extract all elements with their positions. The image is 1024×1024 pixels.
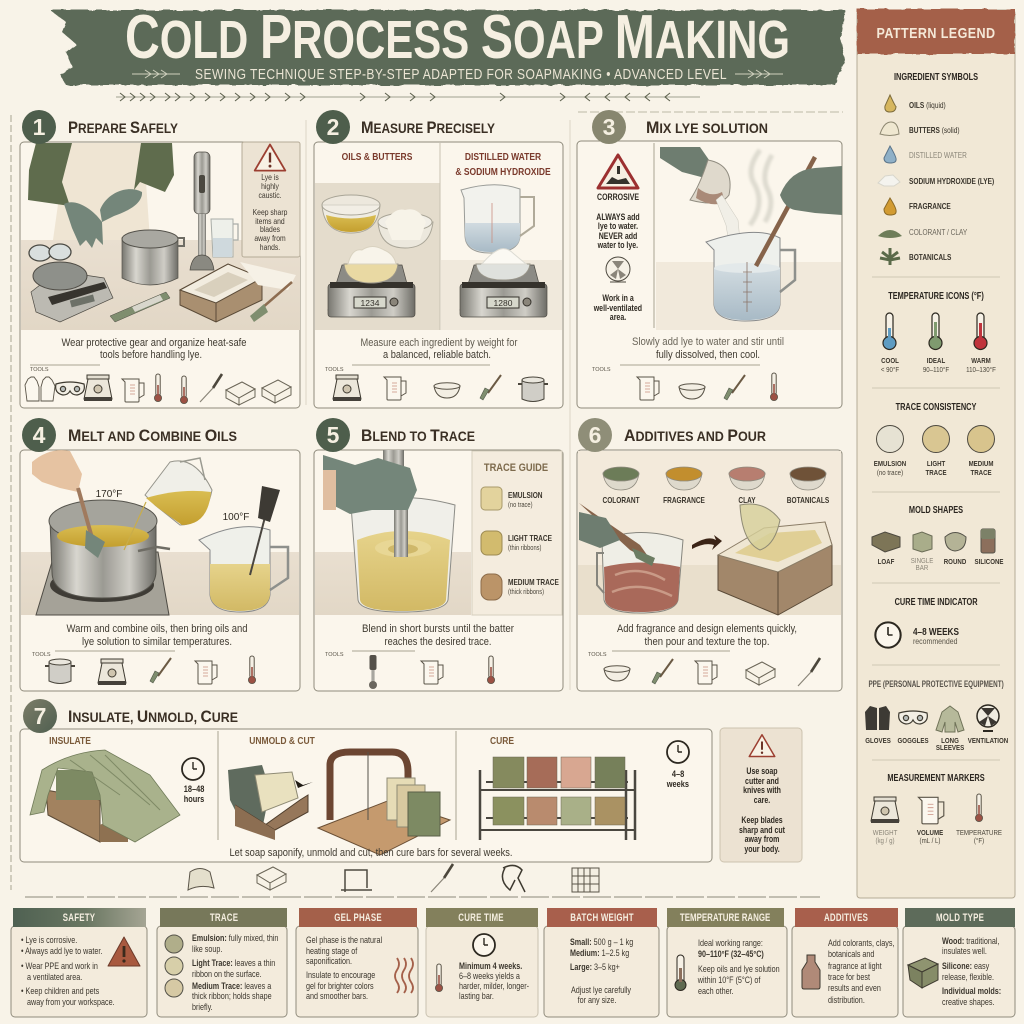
warning box	[242, 142, 300, 257]
card: batch weight: Large: 3–5 kg+	[570, 962, 620, 972]
warning box: hands.	[260, 242, 280, 252]
card: trace: like soup.	[192, 944, 222, 954]
card: mold type: release, flexible.	[942, 972, 994, 982]
step 5 badge	[316, 418, 350, 452]
tools row	[32, 651, 256, 685]
caption	[360, 337, 518, 361]
card: temperature range: each other.	[698, 986, 734, 996]
warning box: Keep sharp	[253, 207, 287, 217]
clock: 4-8 weeks	[666, 741, 689, 789]
caption	[362, 623, 514, 648]
warning box: highly	[261, 181, 279, 191]
safety column	[593, 155, 642, 322]
illustration: additives: BOTANICALS	[787, 495, 829, 505]
mold shapes: BAR	[916, 565, 928, 572]
ingredient symbols: BUTTERS (solid)	[909, 125, 960, 135]
clock: 18-48 hours	[182, 758, 205, 804]
step 3 title: MIX LYE SOLUTION	[646, 118, 768, 137]
legend header	[857, 9, 1015, 54]
ingredient symbols: OILS (liquid)	[909, 100, 946, 110]
trace consistency: TRACE	[925, 470, 947, 477]
trace guide: MEDIUM TRACE	[508, 577, 559, 587]
step 1 badge: 1	[33, 114, 46, 140]
tools row	[25, 365, 291, 405]
safety column: NEVER add	[599, 231, 637, 241]
safety column: ALWAYS add	[596, 212, 640, 222]
card: additives: fragrance at light	[828, 961, 882, 971]
card: mold type: Individual molds:	[942, 986, 1001, 996]
panel: step 7	[20, 729, 712, 862]
warning box: blades	[260, 224, 280, 234]
warning box: Lye is	[261, 172, 279, 182]
card: cure time: Minimum 4 weeks.	[459, 961, 522, 971]
safety column: area.	[610, 312, 626, 322]
caption: Slowly add lye to water and stir until	[632, 336, 784, 348]
tools row: TOOLS	[325, 367, 344, 373]
caption: Blend in short bursts until the batter	[362, 623, 514, 635]
mold shapes: SILICONE	[975, 559, 1004, 566]
step 5: blend to trace	[314, 450, 563, 691]
card: trace: ribbon on the surface.	[192, 969, 262, 979]
card: mold type	[903, 908, 1015, 1017]
step 7 warning box: cutter and	[745, 776, 779, 786]
card: mold type: insulates well.	[942, 946, 987, 956]
card: additives: Add colorants, clays,	[828, 938, 894, 948]
column headings: & SODIUM HYDROXIDE	[455, 166, 551, 177]
caption	[632, 336, 784, 361]
trace consistency: EMULSION	[874, 461, 906, 468]
step 7 warning box: Keep blades	[741, 815, 783, 825]
temperature icons	[872, 277, 1000, 760]
card: gel phase: Gel phase is the natural	[306, 935, 382, 945]
clock: 18-48 hours: 18–48	[184, 783, 205, 794]
personal protective equipment: SLEEVES	[936, 745, 965, 752]
card: batch weight: Small: 500 g – 1 kg	[570, 937, 633, 947]
cure time indicator: 4–8 WEEKS	[913, 626, 959, 637]
legend panel	[857, 9, 1015, 898]
trace consistency: TRACE CONSISTENCY	[896, 401, 977, 412]
card: temperature range: 90–110°F (32–45°C)	[698, 949, 764, 959]
column headings	[342, 151, 551, 177]
step 6 title: ADDITIVES AND POUR	[624, 426, 766, 445]
caption: fully dissolved, then cool.	[656, 349, 760, 361]
safety column: lye to water.	[598, 221, 638, 231]
step 7 warning box: sharp and cut	[739, 825, 785, 835]
caption	[62, 337, 246, 361]
card: gel phase: gel for brighter colors	[306, 981, 374, 991]
card: additives: trace for best	[828, 972, 871, 982]
illustration: curing rack	[480, 735, 636, 840]
illustration: workspace	[21, 143, 300, 330]
cure time indicator: recommended	[913, 636, 958, 646]
ingredient symbols	[878, 71, 995, 265]
step 5 title: BLEND TO TRACE	[361, 426, 475, 445]
illustration: additives	[578, 451, 841, 615]
subtitle: SEWING TECHNIQUE STEP-BY-STEP ADAPTED FOR SOAPMAKING • ADVANCED LEVEL	[195, 67, 727, 83]
cure time indicator: CURE TIME INDICATOR	[895, 596, 978, 607]
card: mold type: Silicone: easy	[942, 961, 989, 971]
card: additives: ADDITIVES	[824, 912, 868, 924]
illustration: melting oils	[21, 450, 299, 615]
step 7 warning box: away from	[745, 834, 779, 844]
measurement markers: MEASUREMENT MARKERS	[887, 772, 985, 783]
clock: 4-8 weeks: weeks	[666, 778, 689, 789]
card: temperature range: Keep oils and lye solution	[698, 964, 780, 974]
safety column: Work in a	[602, 293, 634, 303]
panel: step 6	[577, 450, 842, 691]
caption: lye solution to similar temperatures.	[82, 636, 232, 648]
card: batch weight	[544, 908, 659, 1017]
temperature icons: WARM	[971, 358, 991, 365]
personal protective equipment: VENTILATION	[968, 738, 1008, 745]
step 4 badge: 4	[33, 422, 46, 448]
personal protective equipment: GOGGLES	[898, 738, 929, 745]
card: cure time: 6–8 weeks yields a	[459, 971, 520, 981]
panel: step 5	[314, 450, 563, 691]
card: trace: briefly.	[192, 1002, 213, 1012]
icon: fan	[606, 257, 630, 282]
personal protective equipment: LONG	[941, 738, 959, 745]
temperature icons: IDEAL	[927, 358, 945, 365]
illustration: weighing ingredients	[315, 143, 562, 330]
trace guide: (thick ribbons)	[508, 589, 544, 596]
temperature icons: COOL	[881, 358, 899, 365]
step 3: mix lye solution	[577, 141, 842, 408]
card: additives: results and even	[828, 983, 881, 993]
trace guide: (no trace)	[508, 502, 533, 509]
ingredient symbols: FRAGRANCE	[909, 201, 951, 211]
icon: thermometer	[675, 955, 686, 990]
card: trace: thick ribbon; holds shape	[192, 991, 272, 1001]
card: additives: distribution.	[828, 995, 865, 1005]
trace consistency: (no trace)	[877, 470, 903, 477]
mold shapes: SINGLE	[911, 558, 934, 565]
ingredient symbols: SODIUM HYDROXIDE (LYE)	[909, 176, 995, 186]
caption	[617, 623, 797, 648]
step 2: measure precisely	[314, 142, 563, 408]
title: COLD PROCESS SOAP MAKING	[125, 3, 790, 72]
column headings: DISTILLED WATER	[465, 151, 541, 162]
ingredient symbols: COLORANT / CLAY	[909, 227, 967, 237]
step 2 badge	[316, 110, 350, 144]
measurement markers: (kg / g)	[875, 838, 895, 845]
caption: Add fragrance and design elements quickly,	[617, 623, 797, 635]
illustration: additives: COLORANT	[603, 495, 640, 505]
step 6 badge	[578, 418, 612, 452]
temperature icons: TEMPERATURE ICONS (°F)	[888, 290, 984, 301]
card: trace: TRACE	[210, 912, 239, 924]
step 2 badge: 2	[327, 114, 339, 140]
illustration: insulate: INSULATE	[49, 735, 91, 746]
mold shapes: LOAF	[878, 559, 894, 566]
step 7 title: INSULATE, UNMOLD, CURE	[68, 707, 238, 726]
safety column: water to lye.	[597, 240, 638, 250]
icon: warning triangle	[255, 144, 285, 171]
caption	[66, 623, 248, 648]
card: cure time: harder, milder, longer-	[459, 981, 529, 991]
temperature icons: 90–110°F	[923, 365, 949, 374]
trace guide: (thin ribbons)	[508, 545, 541, 552]
measurement markers: TEMPERATURE	[956, 830, 1002, 837]
card: mold type: MOLD TYPE	[936, 912, 984, 924]
ingredient symbols: DISTILLED WATER	[909, 150, 967, 160]
trace consistency: TRACE	[970, 470, 992, 477]
personal protective equipment	[865, 679, 1008, 752]
card: temperature range: Ideal working range:	[698, 938, 763, 948]
card: gel phase: GEL PHASE	[334, 912, 382, 924]
personal protective equipment: GLOVES	[865, 738, 891, 745]
card: trace: Emulsion: fully mixed, thin	[192, 933, 278, 943]
trace guide	[472, 451, 562, 615]
trace guide: EMULSION	[508, 490, 543, 500]
trace guide: LIGHT TRACE	[508, 533, 552, 543]
step 7: insulate, unmold, cure	[20, 729, 712, 862]
illustration: melting oils: 100°F	[223, 512, 249, 523]
caption: a balanced, reliable batch.	[383, 349, 491, 361]
card: safety: • Wear PPE and work in	[21, 961, 98, 971]
caption: then pour and texture the top.	[644, 636, 770, 648]
panel: step 2	[314, 142, 563, 408]
tools row: TOOLS	[32, 652, 51, 658]
step 7 warning box: knives with	[743, 785, 781, 795]
trace consistency	[874, 401, 994, 477]
illustration: pouring lye	[654, 143, 842, 330]
card: cure time	[426, 908, 538, 1017]
mold shapes	[872, 504, 1004, 572]
step 7 warning box: care.	[754, 795, 770, 805]
card: safety	[11, 908, 147, 1017]
step 7 badge	[23, 699, 57, 733]
tools row	[325, 651, 495, 689]
illustration: weighing ingredients: 1234	[361, 298, 380, 308]
warning box: caustic.	[258, 190, 282, 200]
step 1 title: PREPARE SAFELY	[68, 118, 178, 137]
step 4: melt and combine oils	[20, 450, 300, 691]
card: trace: Medium Trace: leaves a	[192, 981, 272, 991]
card: cure time: CURE TIME	[458, 912, 504, 924]
card: gel phase	[296, 908, 418, 1017]
card: safety: away from your workspace.	[27, 997, 115, 1007]
step 3 badge: 3	[603, 114, 615, 140]
trace guide: TRACE GUIDE	[484, 462, 548, 474]
card: batch weight: Medium: 1–2.5 kg	[570, 948, 629, 958]
card: additives	[792, 908, 898, 1017]
measurement markers: (mL / L)	[920, 838, 940, 845]
mold shapes: ROUND	[944, 559, 966, 566]
mold shapes: MOLD SHAPES	[909, 504, 963, 515]
illustration: insulate	[30, 735, 180, 842]
illustration: unmold and cut: UNMOLD & CUT	[249, 735, 315, 746]
illustration: weighing ingredients: 1280	[494, 298, 513, 308]
illustration: unmold and cut	[228, 735, 450, 855]
icon: bottle	[802, 955, 820, 989]
measurement markers: VOLUME	[917, 830, 944, 837]
icon: mold block	[908, 958, 938, 988]
card: batch weight: BATCH WEIGHT	[570, 912, 634, 924]
clock: 4-8 weeks: 4–8	[672, 768, 684, 779]
trace consistency: LIGHT	[927, 461, 946, 468]
illustration: blending	[315, 450, 471, 615]
card: gel phase: Insulate to encourage	[306, 970, 376, 980]
caption: Warm and combine oils, then bring oils and	[66, 623, 248, 635]
step 6 badge: 6	[589, 422, 601, 448]
temperature icons: 110–130°F	[966, 365, 996, 374]
card: safety: a ventilated area.	[27, 972, 82, 982]
card: cure time: lasting bar.	[459, 991, 494, 1001]
card: temperature range	[667, 908, 787, 1017]
illustration: additives: FRAGRANCE	[663, 495, 705, 505]
trace consistency: MEDIUM	[969, 461, 994, 468]
icon: heat waves	[395, 958, 413, 993]
step 3 badge	[592, 110, 626, 144]
caption: tools before handling lye.	[100, 349, 202, 361]
card: safety: • Always add lye to water.	[21, 946, 102, 956]
title banner	[50, 3, 845, 85]
step 7 tools row	[188, 864, 599, 892]
step 1 badge	[22, 110, 56, 144]
clock: 18-48 hours: hours	[184, 793, 205, 804]
card: batch weight: for any size.	[578, 995, 616, 1005]
step 7 warning box	[720, 728, 802, 862]
step 2 title: MEASURE PRECISELY	[361, 118, 495, 137]
tools row: TOOLS	[588, 652, 607, 658]
card: trace: Light Trace: leaves a thin	[192, 958, 275, 968]
personal protective equipment: PPE (PERSONAL PROTECTIVE EQUIPMENT)	[868, 679, 1004, 689]
card: temperature range: within 10°F (5°C) of	[697, 975, 761, 985]
card: temperature range: TEMPERATURE RANGE	[680, 912, 771, 924]
tools row: TOOLS	[325, 652, 344, 658]
cure time indicator	[875, 596, 978, 648]
panel: step 3	[577, 141, 842, 408]
safety column: CORROSIVE	[597, 192, 640, 202]
step 6: additives and pour	[577, 450, 842, 691]
card: gel phase: and smoother bars.	[306, 991, 368, 1001]
caption: Let soap saponify, unmold and cut, then cure bars for several weeks.	[230, 847, 512, 859]
card: gel phase: heating stage of	[306, 946, 358, 956]
caption: Measure each ingredient by weight for	[360, 337, 518, 349]
measurement markers: WEIGHT	[873, 830, 898, 837]
temperature icons: < 90°F	[881, 365, 899, 374]
ingredient symbols: BOTANICALS	[909, 252, 952, 262]
warning box: items and	[255, 216, 285, 226]
step 7 warning box: your body.	[744, 844, 780, 854]
measurement markers: (°F)	[974, 836, 984, 845]
card: mold type: creative shapes.	[942, 997, 994, 1007]
card: safety: SAFETY	[63, 912, 96, 924]
caption: Wear protective gear and organize heat-safe	[62, 337, 246, 349]
tools row	[592, 365, 778, 401]
tools row	[325, 365, 548, 402]
illustration: curing rack: CURE	[490, 735, 514, 746]
ingredient symbols: INGREDIENT SYMBOLS	[894, 71, 978, 82]
card: batch weight: Adjust lye carefully	[571, 985, 631, 995]
column headings: OILS & BUTTERS	[342, 151, 412, 162]
warning box: away from	[254, 233, 286, 243]
card: mold type: Wood: traditional,	[942, 936, 1000, 946]
illustration: melting oils: 170°F	[96, 489, 122, 500]
step 4 title: MELT AND COMBINE OILS	[68, 426, 237, 445]
tools row: TOOLS	[592, 367, 611, 373]
step 1: prepare safely	[20, 142, 300, 408]
step 7 badge: 7	[34, 703, 46, 729]
caption: reaches the desired trace.	[384, 636, 492, 648]
step 5 badge: 5	[327, 422, 340, 448]
card: additives: botanicals and	[828, 949, 874, 959]
card: safety: • Keep children and pets	[21, 986, 99, 996]
tools row	[588, 651, 820, 686]
panel: step 1	[20, 142, 300, 408]
card: gel phase: saponification.	[306, 956, 352, 966]
safety column: well-ventilated	[593, 303, 642, 313]
step 7 warning box: Use soap	[746, 766, 778, 776]
icon: warning	[108, 937, 140, 966]
step 4 badge	[22, 418, 56, 452]
card: trace	[157, 908, 287, 1017]
tools row: TOOLS	[30, 367, 49, 373]
card: safety: • Lye is corrosive.	[21, 935, 77, 945]
illustration: additives: CLAY	[738, 495, 756, 505]
legend header: PATTERN LEGEND	[876, 25, 996, 42]
panel: step 4	[20, 450, 300, 691]
measurement markers	[871, 772, 1002, 845]
